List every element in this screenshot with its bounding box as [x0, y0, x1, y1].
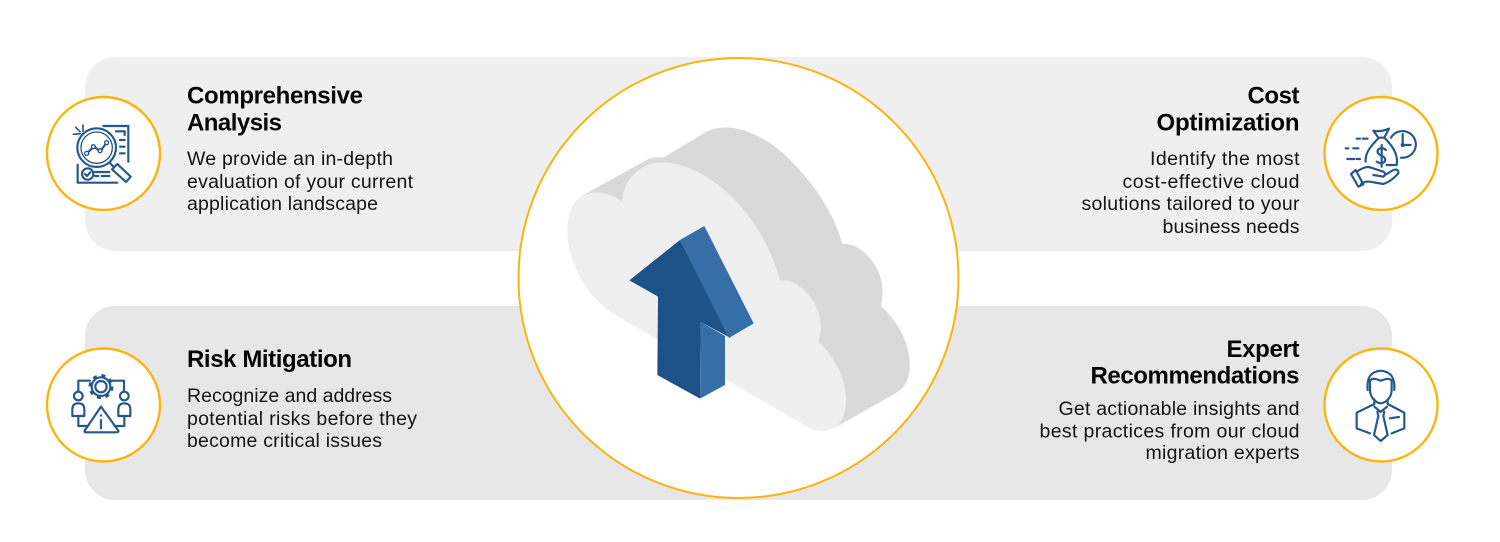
panel: top band — [85, 57, 1392, 251]
icon: expert recommendations — [1324, 348, 1438, 462]
text block: cost optimization: Optimization — [1156, 110, 1300, 136]
text block: expert recommendations: Get actionable insights and — [1058, 398, 1300, 420]
text block: comprehensive analysis: Analysis — [187, 110, 282, 136]
text block: risk mitigation: Risk Mitigation — [187, 346, 352, 373]
text block: expert recommendations: migration experts — [1146, 442, 1300, 464]
illustration: cloud and arrow — [567, 128, 910, 431]
text block: cost optimization: solutions tailored to your — [1082, 193, 1300, 215]
center circle with cloud upload illustration — [518, 58, 958, 498]
text block: comprehensive analysis: We provide an in-depth — [187, 148, 393, 170]
text block: cost optimization: Cost — [1248, 82, 1300, 110]
text block: cost optimization: business needs — [1162, 216, 1300, 238]
text block: expert recommendations: Recommendations — [1090, 362, 1300, 390]
text block: cost optimization: Identify the most — [1150, 148, 1300, 170]
text block: cost optimization — [1082, 82, 1300, 238]
text block: comprehensive analysis — [187, 82, 414, 215]
text block: comprehensive analysis: application landscape — [187, 193, 378, 215]
icon: cost optimization — [1324, 97, 1438, 210]
text block: cost optimization: cost-effective cloud — [1122, 171, 1300, 193]
text block: risk mitigation: potential risks before they — [187, 408, 417, 430]
icon: comprehensive analysis — [47, 97, 160, 210]
text block: risk mitigation: become critical issues — [187, 430, 382, 452]
arrow: light head side — [680, 226, 754, 338]
cloud front face — [567, 162, 846, 431]
text block: expert recommendations — [1040, 336, 1300, 464]
text block: expert recommendations: Expert — [1226, 336, 1300, 363]
arrow: dark face — [629, 240, 730, 399]
panel: bottom band — [85, 306, 1392, 500]
text block: risk mitigation — [187, 346, 417, 452]
text block: risk mitigation: Recognize and address — [187, 385, 392, 407]
cloud back extrusion — [583, 128, 910, 427]
arrow: light shaft side — [700, 322, 725, 399]
icon: risk mitigation — [47, 348, 160, 462]
text block: expert recommendations: best practices from our cloud — [1040, 420, 1300, 442]
text block: comprehensive analysis: evaluation of your current — [187, 171, 414, 193]
text block: comprehensive analysis: Comprehensive — [187, 82, 363, 110]
